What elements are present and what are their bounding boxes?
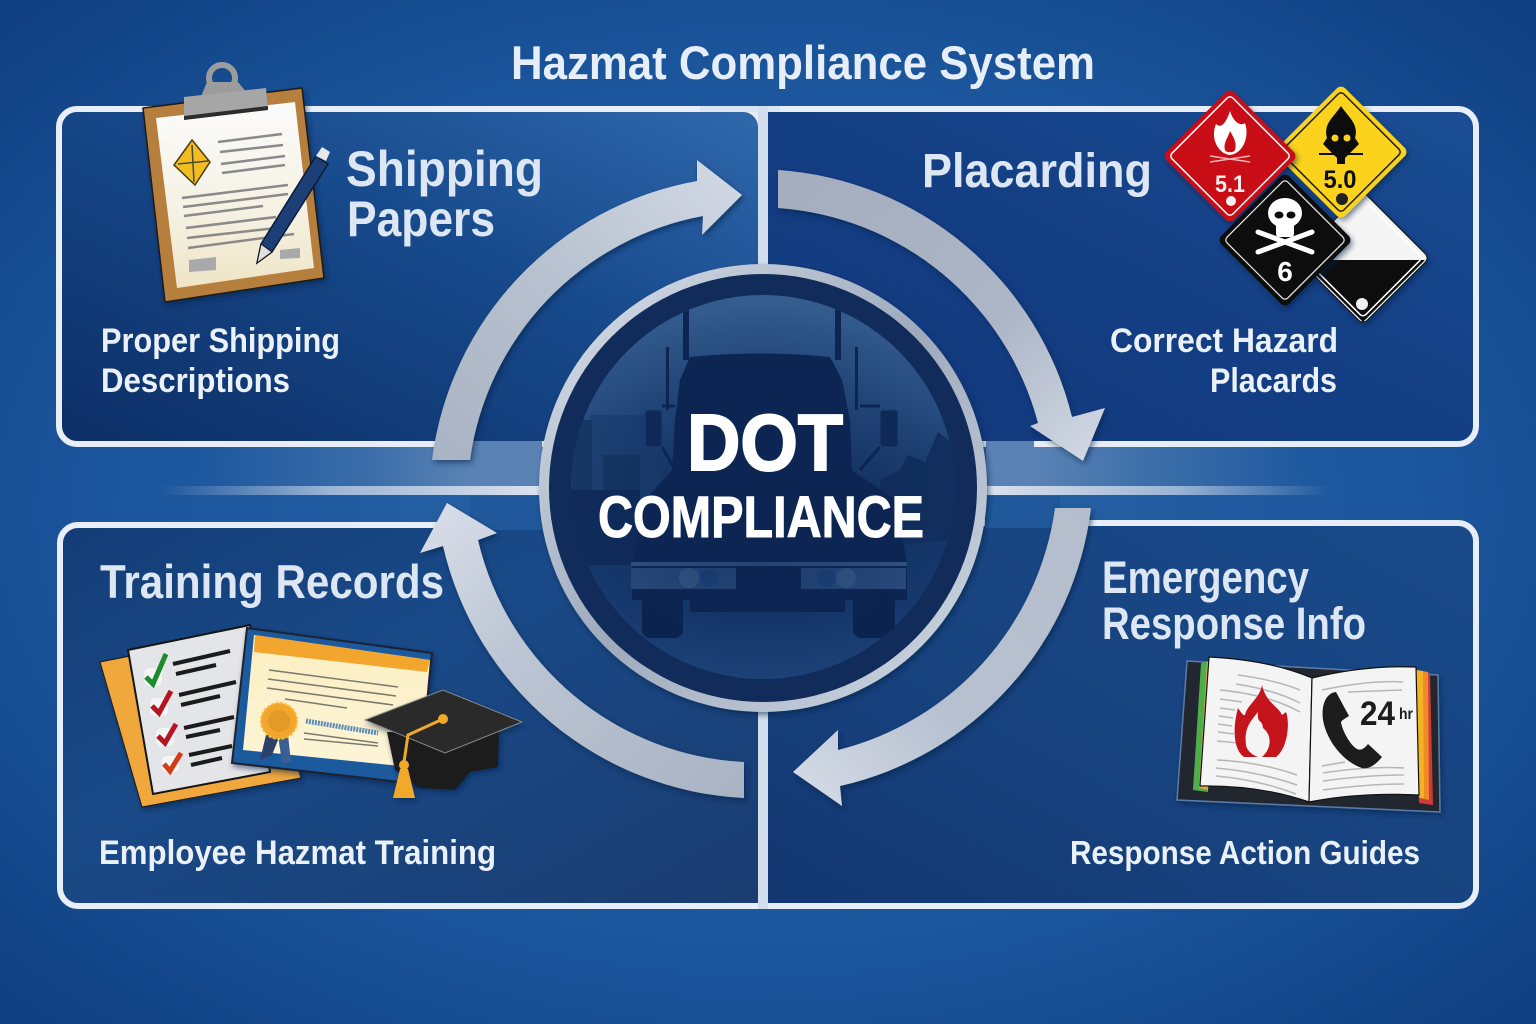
icon: training documents and cap (100, 625, 522, 807)
placard: black 6 (1217, 172, 1353, 308)
icon: telephone (1323, 692, 1382, 768)
center badge: DOT compliance (539, 264, 987, 712)
heading: Emergency Response Info: Response Info (1102, 598, 1366, 649)
placard: yellow 5.0: 5.0 (1324, 166, 1356, 194)
panel: placarding (765, 109, 1476, 444)
caption: proper shipping descriptions: Proper Shipping (101, 322, 340, 360)
icon: emergency response guidebook (1177, 657, 1440, 812)
caption: employee hazmat training: Employee Hazmat Training (99, 834, 496, 872)
checklist (128, 625, 270, 794)
heading: Emergency Response Info (1102, 552, 1366, 649)
center heading: COMPLIANCE: COMPLIANCE (598, 485, 924, 550)
placard: yellow 5.0 (1273, 84, 1409, 220)
center heading: DOT: DOT (687, 398, 843, 487)
truck silhouette scene (571, 309, 955, 650)
caption: correct hazard placards: Placards (1210, 362, 1337, 400)
graduation cap (365, 690, 522, 798)
caption: proper shipping descriptions (101, 322, 340, 400)
arrow: placarding to emergency response (778, 170, 1105, 461)
arrow: training to shipping papers (420, 503, 744, 798)
caption: correct hazard placards (1110, 322, 1338, 400)
heading: Shipping Papers: Papers (347, 191, 495, 247)
panel: training records (60, 525, 761, 906)
folder (100, 630, 301, 807)
arrow: emergency response to training (793, 508, 1091, 806)
arrow: shipping papers to placarding (432, 160, 742, 460)
icon: clipboard with pen (143, 65, 330, 302)
panel: emergency response info (765, 523, 1476, 906)
heading: Emergency Response Info: Emergency (1102, 552, 1309, 603)
heading: Shipping Papers (346, 141, 543, 247)
placard: red 5.1 (1162, 88, 1298, 224)
caption: response action guides: Response Action Guides (1070, 834, 1420, 871)
heading: Placarding: Placarding (922, 145, 1152, 198)
icon: hazard placards (1162, 84, 1429, 324)
placard: black 6: 6 (1277, 256, 1293, 287)
heading: Shipping Papers: Shipping (346, 141, 543, 197)
heading: Training Records: Training Records (100, 555, 444, 608)
title: Hazmat Compliance System (511, 36, 1095, 89)
placard: white and black (1297, 192, 1429, 324)
icon: flame (1235, 685, 1288, 757)
panel: shipping papers (59, 109, 761, 444)
placard: red 5.1: 5.1 (1215, 171, 1245, 198)
text: 24 hr: 24 (1360, 695, 1395, 733)
caption: correct hazard placards: Correct Hazard (1110, 322, 1338, 360)
text: 24 hr: hr (1399, 706, 1413, 723)
caption: proper shipping descriptions: Descriptions (101, 362, 290, 400)
certificate (232, 628, 432, 784)
